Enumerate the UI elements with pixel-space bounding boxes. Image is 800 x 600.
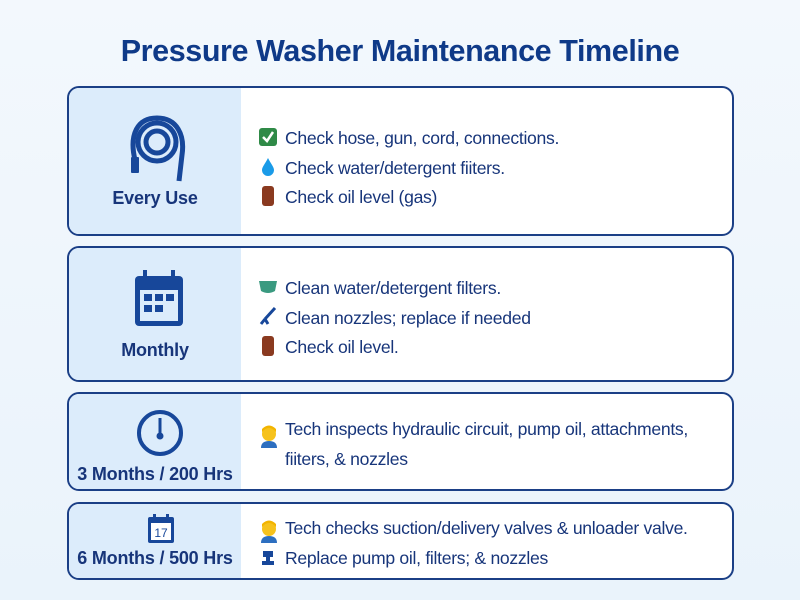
icon: calendar 17: 17 xyxy=(154,526,168,540)
title: Pressure Washer Maintenance Timeline xyxy=(121,34,679,68)
checklist: Check water/detergent fiiters. xyxy=(285,158,505,178)
checklist xyxy=(259,128,559,207)
checklist: Check oil level (gas) xyxy=(285,187,437,207)
label: 3 months: 3 Months / 200 Hrs xyxy=(77,464,233,484)
checklist: Clean nozzles; replace if needed xyxy=(285,308,531,328)
checklist xyxy=(261,518,688,568)
icon: calendar xyxy=(135,270,183,326)
panel: 6 months xyxy=(67,502,734,580)
icon: hose xyxy=(130,116,186,182)
panel: every use xyxy=(67,86,734,236)
icon: calendar 17 xyxy=(148,514,174,543)
checklist: Clean water/detergent filters. xyxy=(285,278,501,298)
checklist: Check hose, gun, cord, connections. xyxy=(285,128,559,148)
label: monthly: Monthly xyxy=(121,340,189,360)
label: 6 months: 6 Months / 500 Hrs xyxy=(77,548,233,568)
checklist: fiiters, & nozzles xyxy=(285,448,408,468)
checklist xyxy=(259,278,531,357)
panel: 3 months xyxy=(67,392,734,491)
checklist: Check oil level. xyxy=(285,337,399,357)
checklist: Tech inspects hydraulic circuit, pump oil, attachments, xyxy=(285,419,688,439)
icon: clock xyxy=(137,410,183,456)
panel: monthly xyxy=(67,246,734,382)
checklist xyxy=(261,419,688,468)
checklist: Replace pump oil, filters; & nozzles xyxy=(285,548,548,568)
checklist: Tech checks suction/delivery valves & unloader valve. xyxy=(285,518,688,538)
label: every use: Every Use xyxy=(112,188,198,208)
